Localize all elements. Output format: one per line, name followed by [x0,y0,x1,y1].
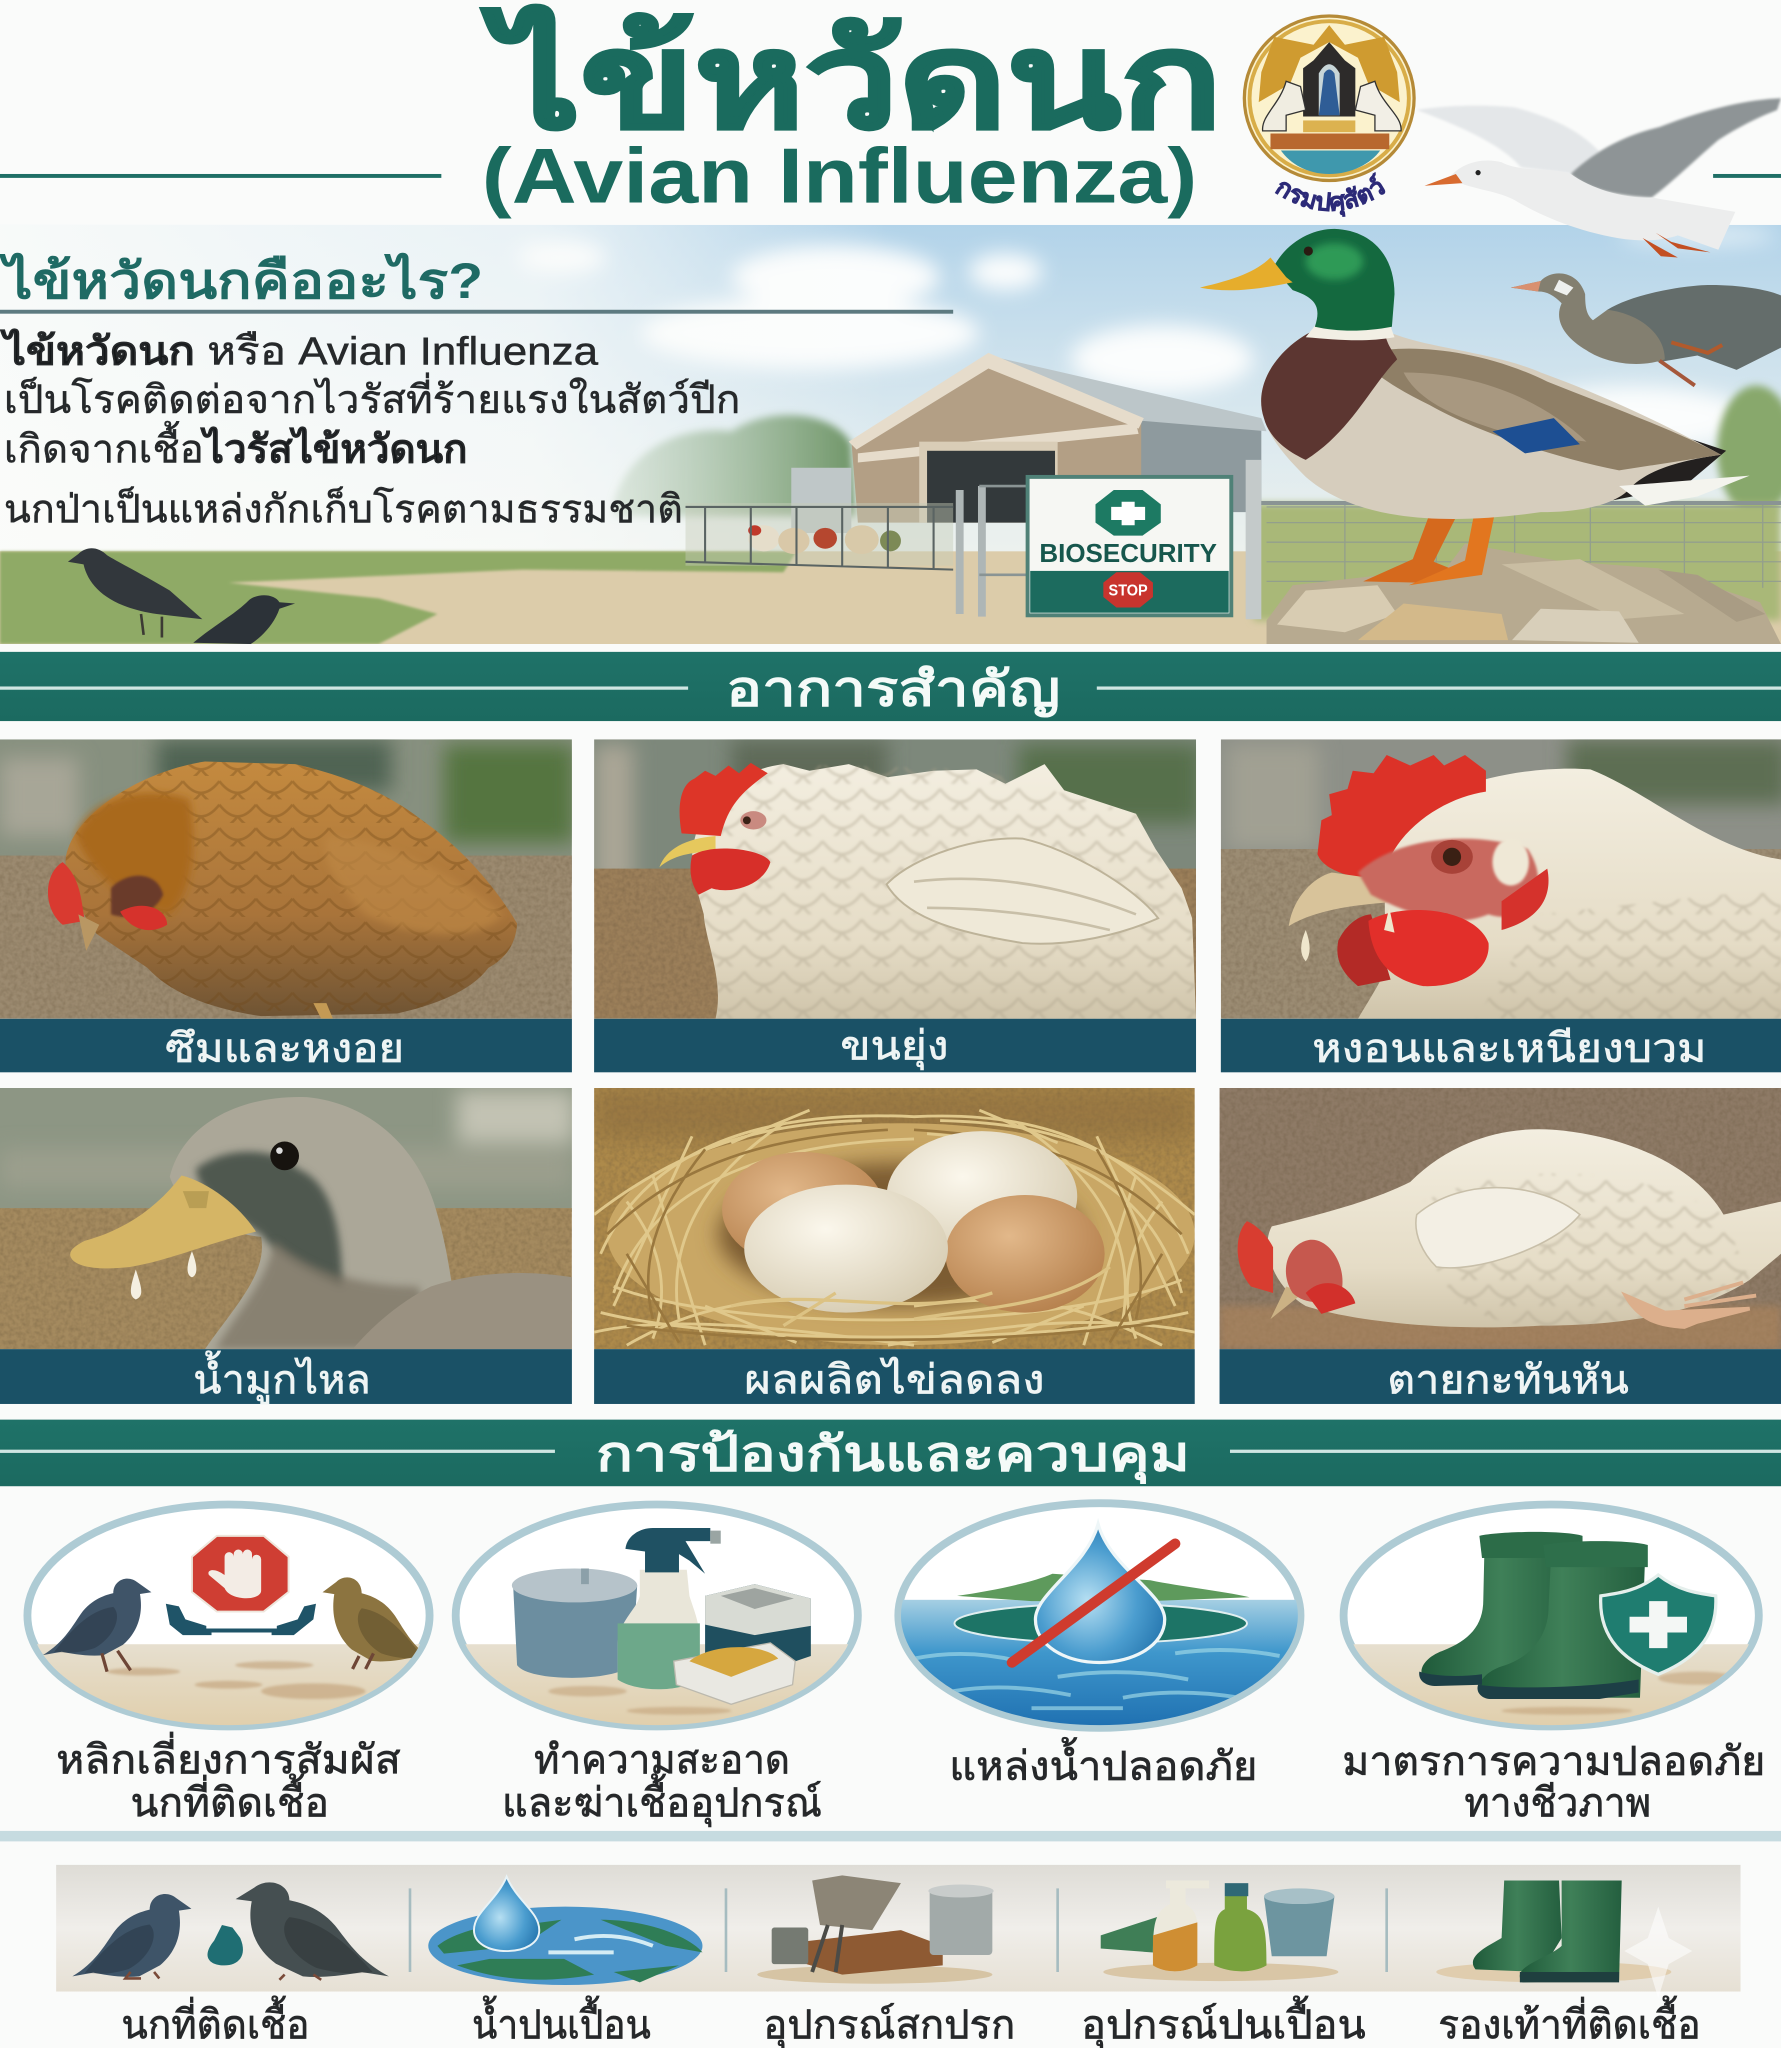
grass left [0,551,796,644]
caption block: prevention labels: และฆ่าเชื้ออุปกรณ์ [502,1774,822,1828]
sky [165,225,1781,552]
biosecurity sign: BIOSECURITY [1039,538,1217,568]
caption block: prevention labels: มาตรการความปลอดภัย [1342,1738,1765,1784]
icon: safe water [898,1503,1306,1730]
caption block: source labels: รองเท้าที่ติดเชื้อ [1438,1996,1701,2048]
caption block: prevention labels: หลิกเลี่ยงการสัมผัส [56,1731,401,1782]
caption block: prevention labels [56,1731,1765,1828]
caption: eggs [594,1349,1195,1404]
caption block: source labels: อุปกรณ์ปนเปื้อน [1081,1996,1366,2048]
banner: symptoms [0,652,1781,721]
text block: description: เป็นโรคติดต่อจากไวรัสที่ร้ายแรงในสัตว์ปีก [4,372,740,422]
flying gull [1417,98,1781,258]
icon: infected boots [1436,1881,1692,1998]
trees [614,386,1781,516]
biosecurity sign: STOP [1109,583,1148,600]
banner: prevention [0,1420,1781,1486]
caption: swollen [1221,1019,1781,1072]
caption: sudden death: ตายกะทันหัน [1387,1357,1629,1403]
icon: contaminated water [428,1877,702,1985]
barn [791,353,1267,533]
icon: cleaning [456,1505,862,1736]
caption: sudden death [1220,1349,1781,1404]
text block: description: นกป่าเป็นแหล่งกักเก็บโรคตามธรรมชาติ [4,486,683,532]
chicken pen [686,503,953,570]
rocks [1267,543,1781,644]
flying goose [1511,273,1781,386]
fence [960,460,1781,619]
caption block: prevention labels: แหล่งน้ำปลอดภัย [949,1737,1257,1789]
header rule [0,174,1781,178]
caption: runny nose: น้ำมูกไหล [193,1351,371,1405]
icon: avoid contact [26,1505,434,1736]
biosecurity sign [1028,477,1231,615]
caption: eggs: ผลผลิตไข่ลดลง [744,1357,1045,1403]
panel: ruffled feathers [594,739,1201,1019]
caption block: prevention labels: ทำความสะอาด [534,1736,790,1782]
caption: runny nose [0,1349,572,1405]
left text wash [0,225,888,564]
caption: swollen: หงอนและเหนียงบวม [1312,1025,1707,1071]
heading: what is avian flu [0,252,953,314]
small birds [68,548,295,644]
ground [0,551,1781,644]
panel: runny nose duck [0,1088,575,1349]
caption block: source labels: น้ำปนเปื้อน [472,1996,651,2048]
panel: hero scene [0,225,1781,644]
panel: fewer eggs [594,1088,1195,1349]
caption: ruffled: ขนยุ่ง [840,1022,949,1070]
panel: sudden death [1220,1088,1781,1349]
text block: description [0,329,740,532]
divider [0,1831,1781,1841]
caption: ruffled [594,1019,1196,1072]
caption block: source labels: นกที่ติดเชื้อ [121,1996,309,2048]
caption block: prevention labels: ทางชีวภาพ [1464,1780,1651,1826]
panel: lethargic hen [0,739,575,1019]
icon: dirty tools [757,1875,994,1984]
caption block: source labels [121,1996,1701,2048]
text block: description: ไข้หวัดนก หรือ Avian Influenza [0,329,598,374]
caption block: prevention labels: นกที่ติดเชื้อ [131,1774,329,1826]
banner: prevention: การป้องกันและควบคุม [596,1428,1190,1485]
grass right [1253,503,1781,621]
title: ไข้หวัดนก [481,5,1222,156]
title [481,5,1222,220]
caption: lethargic: ซึมและหงอย [165,1025,404,1071]
clouds [517,225,1776,449]
icon: infected birds [72,1882,389,1980]
caption block: source labels: อุปกรณ์สกปรก [763,2002,1015,2048]
subtitle: (Avian Influenza) [482,132,1197,220]
text block: description: เกิดจากเชื้อไวรัสไข้หวัดนก [4,421,467,472]
icon: biosecurity boots [1344,1505,1763,1736]
panel: swollen comb and wattle [1221,739,1781,1019]
caption: lethargic [0,1019,572,1072]
heading: what is avian flu: ไข้หวัดนกคืออะไร? [0,252,483,309]
banner: symptoms: อาการสำคัญ [726,662,1060,717]
seal: department of livestock [1242,14,1416,217]
icon: contaminated supplies [1101,1881,1338,1981]
seal caption: กรมปศุสัตว์ [1274,172,1386,217]
mallard duck [1200,229,1750,585]
panel: transmission sources strip [56,1865,1741,1998]
